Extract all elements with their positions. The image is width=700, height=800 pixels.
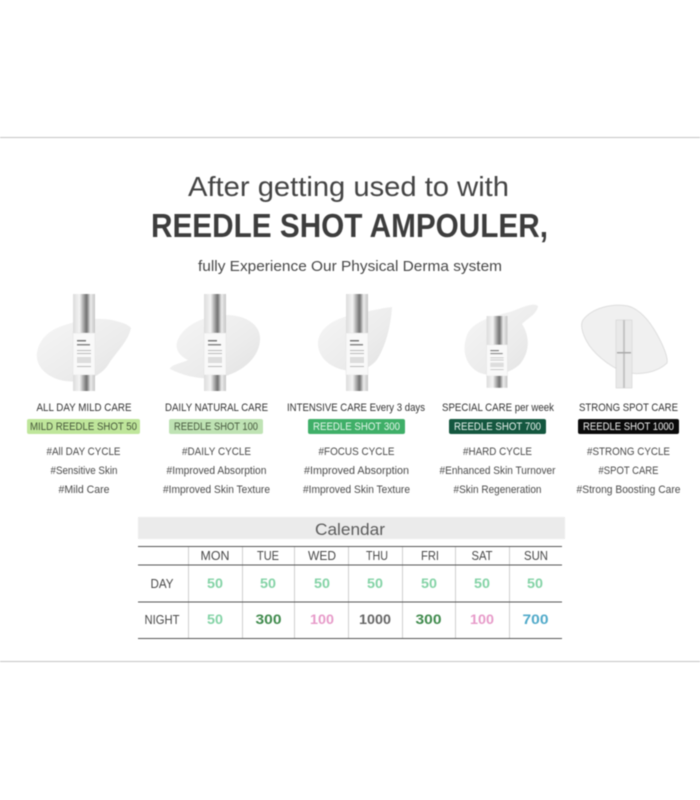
weekday header row: SUN bbox=[524, 548, 548, 563]
hashtags: #Strong Boosting Care bbox=[576, 484, 680, 496]
hashtags: #Improved Absorption bbox=[166, 465, 266, 477]
weekday header row: WED bbox=[308, 548, 336, 563]
night row: 300 bbox=[256, 612, 282, 627]
calendar table bbox=[138, 546, 562, 638]
care label: DAILY NATURAL CARE bbox=[165, 402, 268, 414]
day row: 50 bbox=[207, 576, 223, 591]
hashtags bbox=[46, 446, 120, 496]
icon: cream swatch and bottle 50 bbox=[37, 294, 131, 391]
product 3: reedle shot 300 bbox=[287, 294, 425, 496]
product badge: REEDLE SHOT 700 bbox=[454, 421, 541, 433]
day row bbox=[150, 576, 543, 591]
product 4: reedle shot 700 bbox=[440, 305, 556, 496]
weekday header row: FRI bbox=[421, 548, 439, 563]
night row: 700 bbox=[522, 612, 548, 627]
hashtags: #Skin Regeneration bbox=[454, 484, 542, 496]
product badge: REEDLE SHOT 1000 bbox=[583, 421, 674, 433]
weekday header row: TUE bbox=[257, 548, 279, 563]
product badge: REEDLE SHOT 300 bbox=[313, 421, 400, 433]
title: After getting used to with bbox=[188, 171, 509, 202]
day row: 50 bbox=[260, 576, 276, 591]
hashtags bbox=[303, 446, 410, 496]
icon: cream swatch and bottle 700 bbox=[465, 305, 538, 388]
product badge: REEDLE SHOT 100 bbox=[174, 421, 258, 433]
weekday header row bbox=[200, 548, 548, 563]
care label: SPECIAL CARE per week bbox=[442, 402, 554, 414]
day row: 50 bbox=[367, 576, 383, 591]
product 2: reedle shot 100 bbox=[163, 294, 270, 496]
night row: 300 bbox=[416, 612, 442, 627]
icon: cream swatch and bottle 300 bbox=[318, 294, 392, 391]
hashtags: #Improved Absorption bbox=[304, 465, 409, 477]
care label: ALL DAY MILD CARE bbox=[36, 402, 132, 414]
day row: 50 bbox=[474, 576, 490, 591]
title: REEDLE SHOT AMPOULER, bbox=[151, 207, 548, 244]
night row: 100 bbox=[470, 612, 494, 627]
day row: 50 bbox=[527, 576, 543, 591]
product 5: reedle shot 1000 bbox=[576, 305, 680, 496]
product badge: MILD REEDLE SHOT 50 bbox=[30, 421, 137, 433]
hashtags: #Enhanced Skin Turnover bbox=[440, 465, 556, 477]
day row: DAY bbox=[150, 576, 174, 591]
hashtags bbox=[440, 446, 556, 496]
night row: 50 bbox=[207, 612, 223, 627]
night row: 100 bbox=[310, 612, 334, 627]
hashtags: #Improved Skin Texture bbox=[163, 484, 270, 496]
night row bbox=[144, 612, 548, 627]
hashtags: #SPOT CARE bbox=[598, 465, 658, 477]
weekday header row: THU bbox=[366, 548, 388, 563]
weekday header row: SAT bbox=[472, 548, 493, 563]
weekday header row: MON bbox=[200, 548, 230, 563]
day row: 50 bbox=[314, 576, 330, 591]
product 1: mild reedle shot 50 bbox=[27, 294, 140, 496]
hashtags: #Improved Skin Texture bbox=[303, 484, 410, 496]
icon: cream swatch and tube 1000 bbox=[582, 305, 667, 388]
product badge bbox=[169, 419, 263, 434]
title bbox=[151, 171, 548, 244]
hashtags bbox=[163, 446, 270, 496]
hashtags: #FOCUS CYCLE bbox=[318, 446, 394, 458]
hashtags: #All DAY CYCLE bbox=[46, 446, 120, 458]
hashtags: #Mild Care bbox=[58, 484, 110, 496]
icon: cream swatch and bottle 100 bbox=[170, 294, 260, 391]
care label: INTENSIVE CARE Every 3 days bbox=[287, 402, 425, 414]
hashtags: #HARD CYCLE bbox=[463, 446, 532, 458]
calendar heading: Calendar bbox=[315, 521, 386, 539]
care label: STRONG SPOT CARE bbox=[579, 402, 678, 414]
calendar heading bbox=[138, 517, 565, 539]
hashtags: #STRONG CYCLE bbox=[587, 446, 670, 458]
subtitle: fully Experience Our Physical Derma system bbox=[198, 258, 502, 275]
hashtags: #DAILY CYCLE bbox=[182, 446, 251, 458]
day row: 50 bbox=[421, 576, 437, 591]
night row: NIGHT bbox=[144, 612, 180, 627]
hashtags bbox=[576, 446, 680, 496]
night row: 1000 bbox=[359, 612, 391, 627]
hashtags: #Sensitive Skin bbox=[50, 465, 118, 477]
